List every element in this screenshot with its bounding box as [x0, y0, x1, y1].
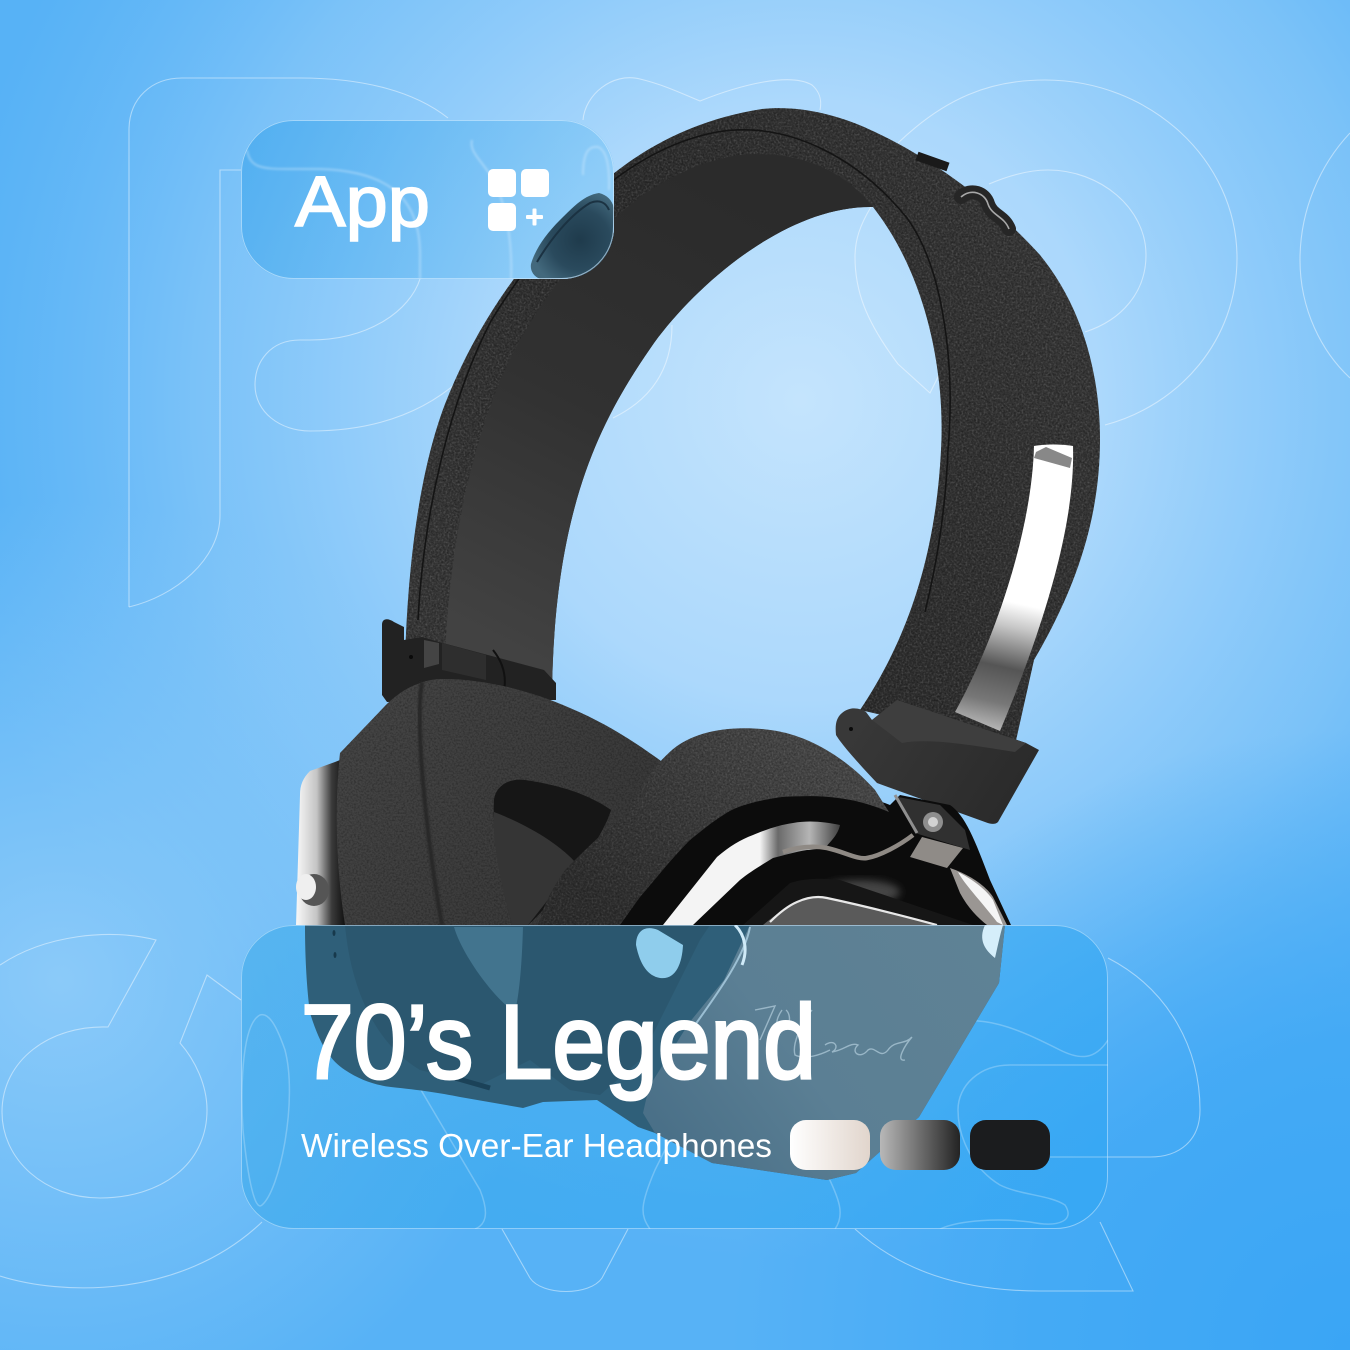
left cup button: [296, 874, 329, 906]
refracted headphones: [305, 925, 1005, 1180]
refracted face plate: [643, 925, 1005, 1180]
product glass panel: [241, 925, 1108, 1229]
left ear pad: [330, 675, 680, 925]
signature: [755, 1006, 912, 1060]
panel border: [242, 926, 1108, 1228]
right yoke clip: [836, 700, 1039, 824]
chrome slider: [955, 444, 1073, 731]
refracted outlines: [242, 1015, 1108, 1229]
title: 70’s Legend: [301, 984, 816, 1101]
headphones product shot: [296, 100, 1110, 925]
subtitle: Wireless Over-Ear Headphones: [301, 1127, 772, 1164]
colour swatches: [790, 1120, 1050, 1170]
refracted headband blob: [531, 193, 614, 279]
right ear pad: [530, 720, 895, 925]
right ear cup: [612, 790, 1011, 925]
refracted ear pads: [345, 925, 710, 1095]
headband: [400, 100, 1110, 750]
band inner pad: [445, 154, 873, 700]
ear pad opening: [494, 780, 611, 925]
app label: App: [295, 163, 430, 242]
lower silver clip: [950, 868, 1007, 925]
band seam: [418, 130, 950, 620]
refracted chrome: [636, 928, 683, 978]
cup sheen: [834, 876, 902, 900]
refracted lines: [247, 140, 609, 279]
cable: [783, 835, 913, 858]
face plate: [743, 879, 973, 925]
icon: app grid with plus: [488, 169, 549, 231]
left cup chrome: [296, 760, 346, 925]
hinge bolt: [895, 795, 970, 850]
hinge strap: [910, 837, 963, 868]
band logo: [917, 156, 1009, 229]
chrome rim: [663, 822, 840, 925]
panel border: [242, 120, 614, 278]
left yoke clip: [382, 619, 556, 702]
app glass panel: [241, 120, 614, 279]
